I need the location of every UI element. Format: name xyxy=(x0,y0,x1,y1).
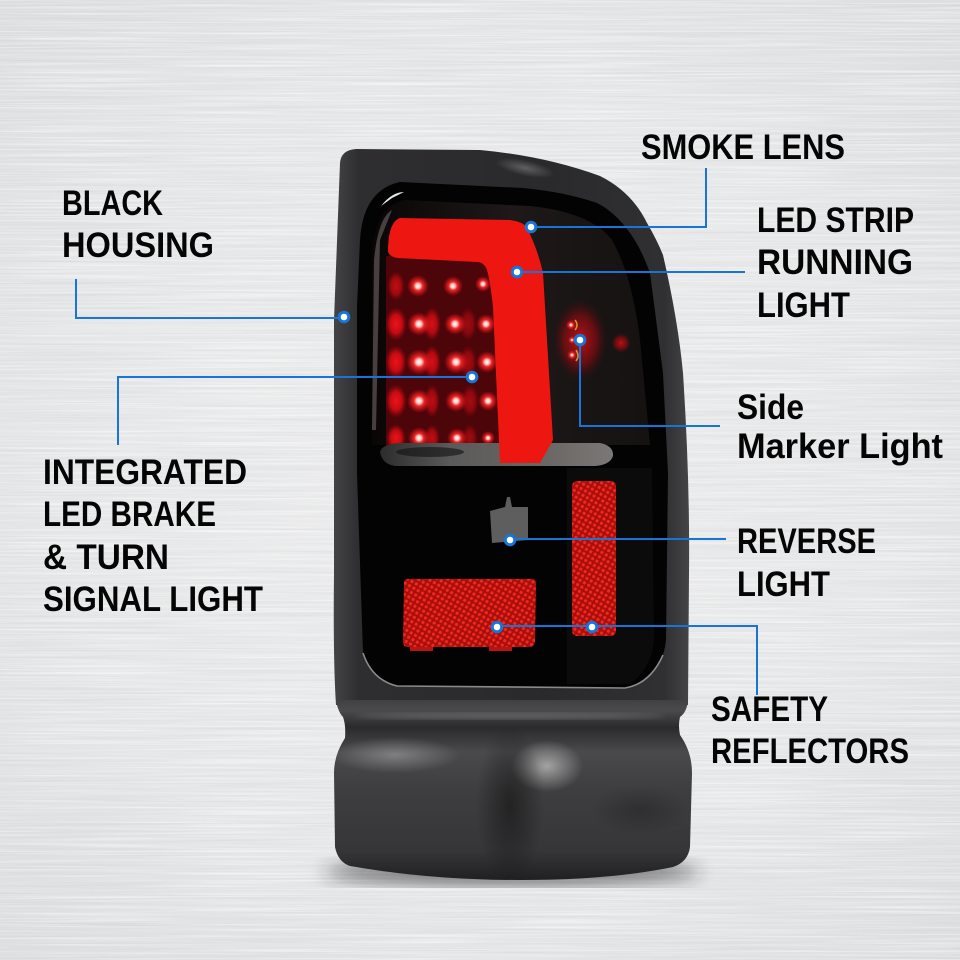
label: safety reflectors: REFLECTORS xyxy=(711,732,909,771)
label: integrated LED brake and turn signal light: INTEGRATED xyxy=(43,453,247,492)
lens highlight lip xyxy=(363,653,663,688)
label: integrated LED brake and turn signal light: & TURN xyxy=(43,538,169,577)
label: safety reflectors xyxy=(711,690,909,771)
ground shadow xyxy=(324,859,700,885)
side marker LEDs xyxy=(553,300,631,380)
label: LED strip running light: RUNNING xyxy=(757,243,913,282)
label: integrated LED brake and turn signal light xyxy=(43,453,263,619)
label: black housing: HOUSING xyxy=(62,226,214,265)
label: integrated LED brake and turn signal light: LED BRAKE xyxy=(43,495,216,534)
housing body xyxy=(334,149,689,705)
vertical reflector xyxy=(572,481,616,636)
housing highlight xyxy=(494,154,556,182)
gray lip of chamber xyxy=(380,443,613,466)
label: safety reflectors: SAFETY xyxy=(711,690,828,729)
lower reflector xyxy=(403,579,536,651)
LED array xyxy=(385,271,498,452)
label: reverse light xyxy=(737,522,876,604)
label: LED strip running light: LIGHT xyxy=(757,286,850,325)
label: LED strip running light xyxy=(757,201,914,325)
label: LED strip running light: LED STRIP xyxy=(757,201,914,240)
label: reverse light: LIGHT xyxy=(737,565,830,604)
base collar xyxy=(330,695,695,885)
label: black housing xyxy=(62,184,214,265)
label: side marker light xyxy=(737,388,943,466)
label: integrated LED brake and turn signal light: SIGNAL LIGHT xyxy=(43,580,263,619)
upper smoke panel xyxy=(372,200,650,445)
tail light product xyxy=(324,149,700,885)
label: side marker light: Marker Light xyxy=(737,427,943,466)
label: reverse light: REVERSE xyxy=(737,522,876,561)
lower chamber right panel xyxy=(567,468,654,684)
callout dots xyxy=(339,222,597,632)
label: black housing: BLACK xyxy=(62,184,163,223)
upper red LED chamber xyxy=(386,256,504,446)
label: smoke lens: SMOKE LENS xyxy=(641,128,845,167)
LED strip running light xyxy=(388,218,553,463)
callout lines xyxy=(76,168,757,695)
lens smoke xyxy=(357,182,668,688)
reverse bulb xyxy=(490,497,528,543)
label: side marker light: Side xyxy=(737,388,804,427)
